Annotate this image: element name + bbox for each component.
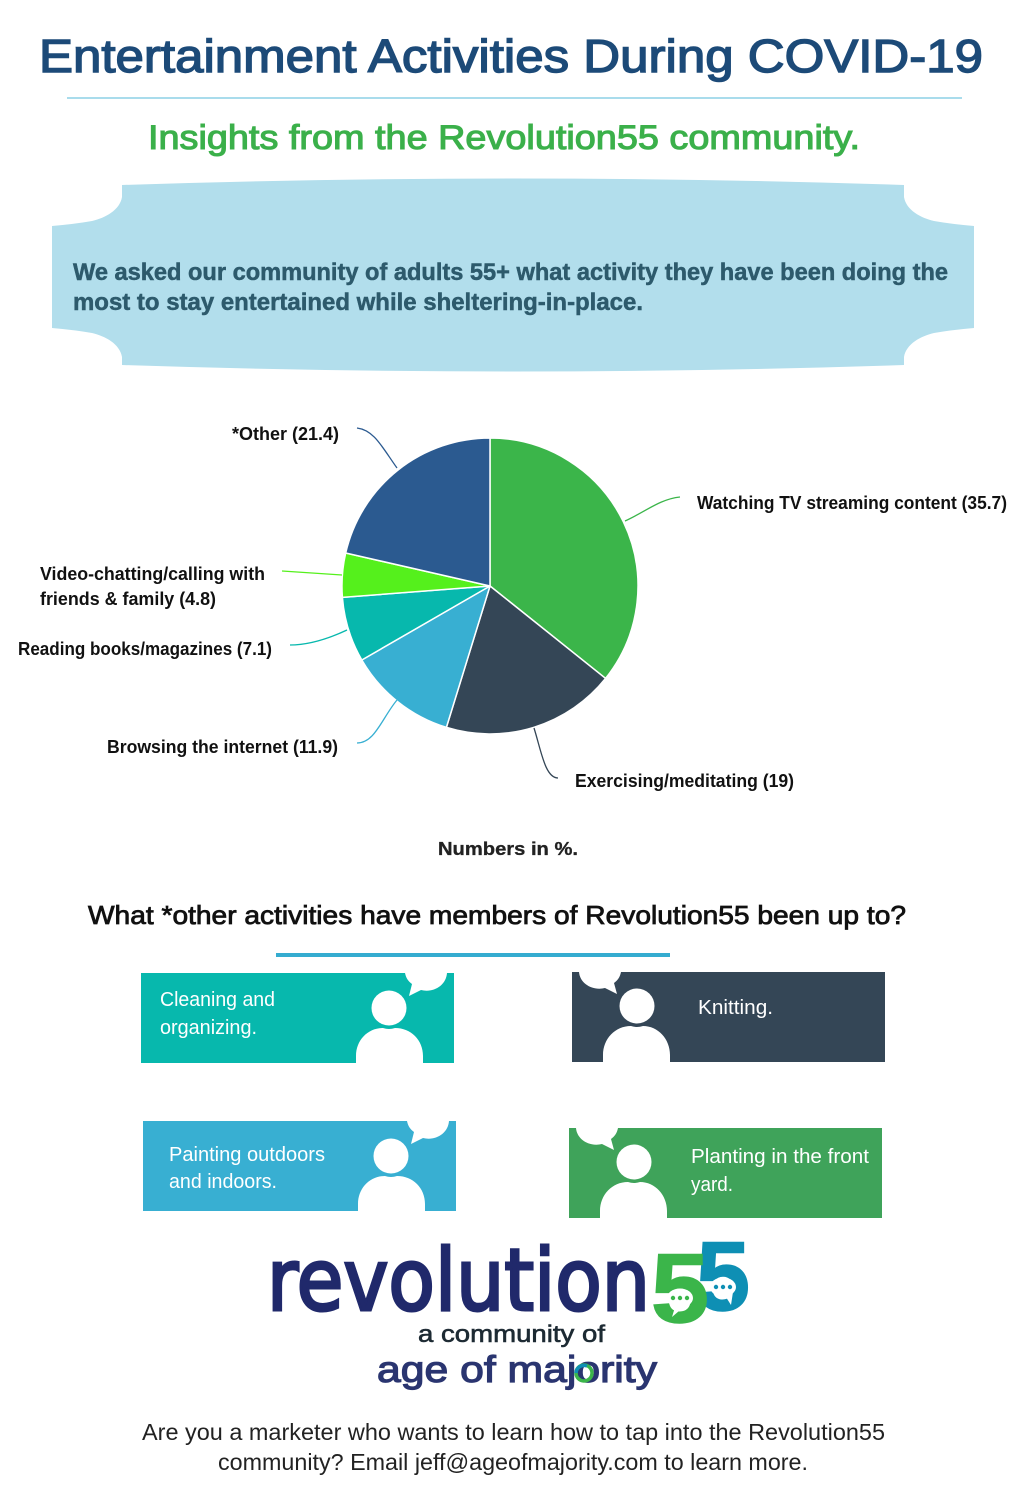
leader lines (282, 428, 680, 778)
card text: and indoors. (169, 1171, 277, 1193)
chart labels: Reading books/magazines (7.1) (18, 639, 272, 659)
logo: age of majority: age of majority (377, 1349, 658, 1390)
card text (691, 1146, 869, 1196)
slice: browsing (362, 586, 490, 727)
slice: watching TV (490, 438, 638, 678)
footer call to action: Are you a marketer who wants to learn how to tap into the Revolution55 (142, 1419, 885, 1445)
chart labels: *Other (21.4) (232, 424, 339, 444)
logo: revolution55: revolution (267, 1231, 650, 1331)
survey question text: most to stay entertained while sheltering-in-place. (73, 289, 643, 316)
footer call to action (142, 1419, 885, 1475)
section heading: What *other activities have members of Revolution55 been up to? (88, 900, 906, 930)
chart labels: Video-chatting/calling with (40, 564, 265, 584)
chart labels (18, 424, 1007, 791)
slice: other (346, 438, 490, 586)
chart labels: Exercising/meditating (19) (575, 771, 794, 791)
chart labels: Browsing the internet (11.9) (107, 737, 338, 757)
card: knitting (572, 972, 885, 1062)
card text: yard. (691, 1174, 733, 1196)
card text: Cleaning and (160, 989, 275, 1011)
icon: person with speech bubble (576, 1128, 667, 1218)
icon: person with speech bubble (579, 972, 670, 1062)
title: Entertainment Activities During COVID-19 (39, 30, 983, 82)
logo numeral: green 5: 5 (651, 1233, 709, 1343)
survey question text: We asked our community of adults 55+ what activity they have been doing the (73, 259, 948, 286)
chart labels: Watching TV streaming content (35.7) (697, 493, 1007, 513)
card text: Painting outdoors (169, 1144, 325, 1166)
card: painting (143, 1121, 456, 1211)
card text: organizing. (160, 1017, 257, 1039)
logo numeral: blue 5: 5 (696, 1221, 750, 1331)
card text: Knitting. (698, 997, 773, 1019)
subtitle: Insights from the Revolution55 community. (148, 119, 860, 157)
card text (169, 1144, 325, 1193)
chart note: Numbers in %. (438, 839, 578, 859)
card text: Planting in the front (691, 1146, 869, 1168)
slice: exercising (446, 586, 606, 734)
footer call to action: community? Email jeff@ageofmajority.com to learn more. (218, 1449, 808, 1475)
slice: video chatting (342, 553, 490, 597)
chart labels: friends & family (4.8) (40, 589, 216, 609)
survey question text (73, 259, 948, 316)
card: cleaning and organizing (141, 973, 454, 1063)
icon: person with speech bubble (356, 973, 447, 1063)
panel: survey question banner (52, 178, 974, 372)
slice: reading (342, 586, 490, 660)
logo tagline: a community of (418, 1321, 605, 1348)
pie chart (342, 438, 638, 734)
icon: person with speech bubble (358, 1121, 449, 1211)
card: planting (569, 1128, 882, 1218)
card text (160, 989, 275, 1039)
